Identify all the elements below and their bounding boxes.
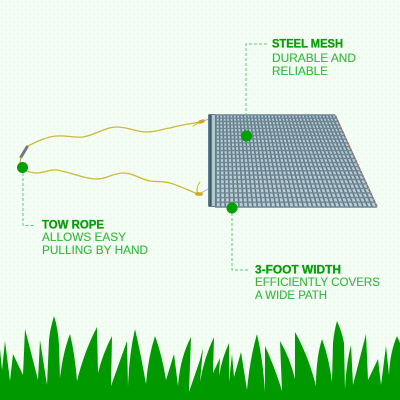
callout: tow rope: [17, 162, 148, 257]
callout: steel mesh: STEEL MESH: [272, 38, 343, 50]
icon: tow rope: [20, 119, 209, 194]
callout: 3-foot width: [226, 202, 380, 302]
callout: 3-foot width: 3-FOOT WIDTH: [255, 264, 341, 276]
callout: tow rope: ALLOWS EASY: [42, 232, 126, 244]
callout: steel mesh: [241, 38, 356, 142]
steel mesh drag mat: [208, 114, 377, 207]
callout: steel mesh: DURABLE AND: [272, 53, 356, 65]
mesh panel: [215, 115, 377, 207]
grass border: [0, 316, 400, 400]
callout: tow rope: TOW ROPE: [42, 220, 104, 232]
callout: 3-foot width: A WIDE PATH: [255, 290, 327, 302]
callout: tow rope: PULLING BY HAND: [42, 245, 148, 257]
roller bar: [208, 114, 216, 207]
callout: 3-foot width: EFFICIENTLY COVERS: [255, 277, 380, 289]
callout: steel mesh: RELIABLE: [272, 66, 328, 78]
